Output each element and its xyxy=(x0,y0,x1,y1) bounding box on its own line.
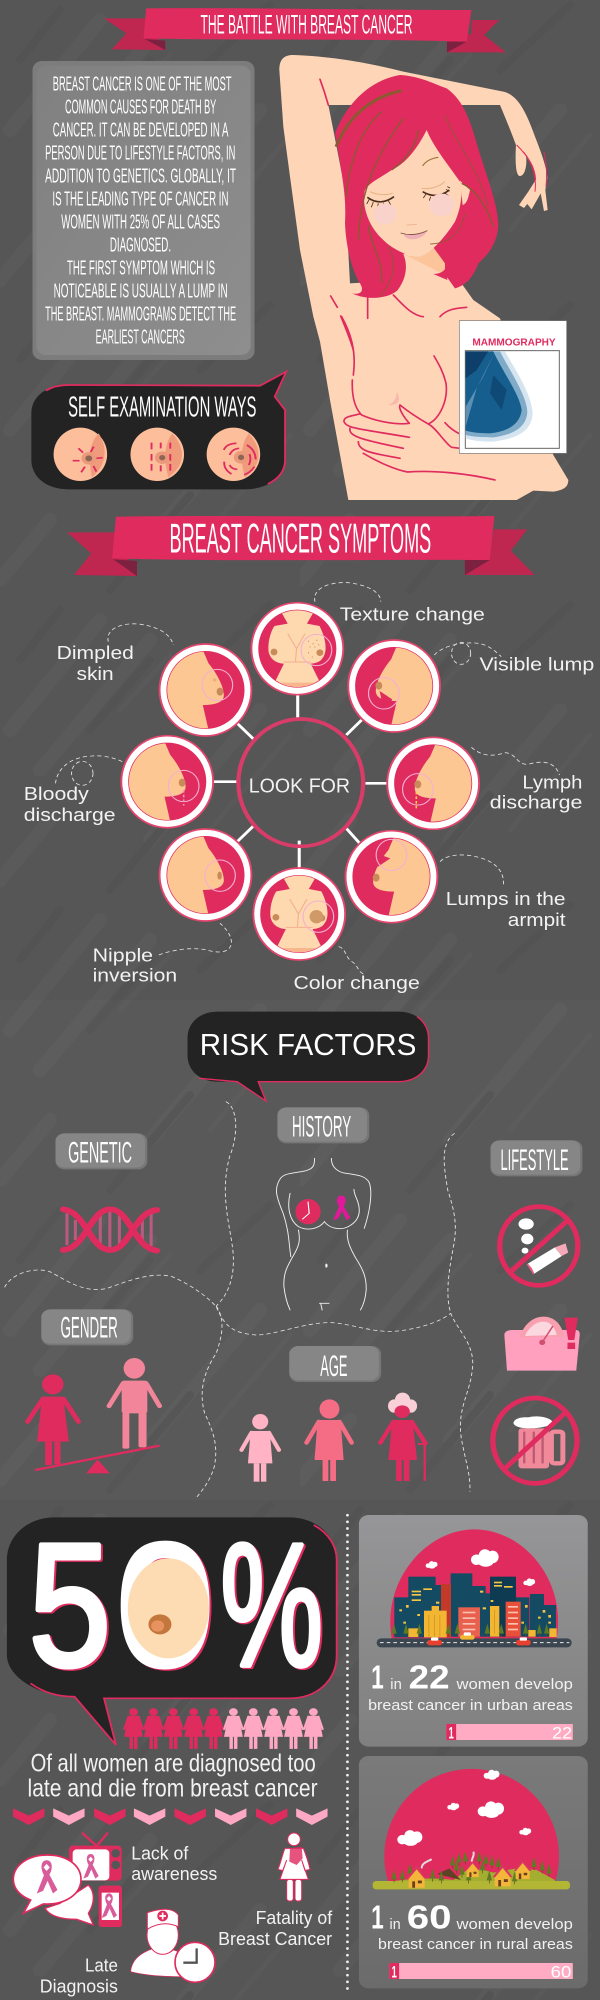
label: visible lump xyxy=(434,642,594,675)
section: symptoms xyxy=(24,515,594,994)
label: fatality of breast cancer xyxy=(218,1908,333,1950)
icon: no smoking xyxy=(500,1207,578,1285)
icon: gender seesaw xyxy=(28,1358,160,1473)
label: lack of awareness: Lack of xyxy=(131,1844,189,1864)
label: texture change xyxy=(315,583,485,625)
icon: no alcohol xyxy=(493,1398,577,1483)
mammography card: MAMMOGRAPHY xyxy=(472,338,556,349)
label: lumps in the armpit: armpit xyxy=(508,910,566,931)
diagnosis text: Of all women are diagnosed too xyxy=(31,1748,316,1777)
section: risk factors: GENDER xyxy=(60,1310,118,1344)
bar: rural: 1 xyxy=(391,1962,397,1981)
label: nipple inversion xyxy=(93,923,232,986)
row of women icons xyxy=(124,1708,323,1749)
label: color change xyxy=(293,947,420,994)
icon: radial exam xyxy=(54,428,107,481)
icon: age figures xyxy=(241,1393,426,1482)
stat: rural: 60 xyxy=(407,1899,452,1936)
self examination bubble xyxy=(31,372,286,489)
icon: doctor with clock xyxy=(131,1909,215,1982)
label: late diagnosis: Diagnosis xyxy=(40,1977,118,1997)
icon: vertical exam xyxy=(130,428,184,481)
section: intro: PERSON DUE TO LIFESTYLE FACTORS, IN xyxy=(45,142,235,164)
icon: torso history xyxy=(276,1158,371,1310)
stat: rural: 1 xyxy=(371,1899,384,1936)
look for ring xyxy=(238,719,363,846)
label: visible lump: Visible lump xyxy=(479,655,594,675)
section: statistics xyxy=(7,1506,588,1997)
chevrons xyxy=(13,1808,328,1825)
illustration: village xyxy=(373,1769,570,1889)
stat: urban: women develop xyxy=(455,1677,573,1693)
section: intro: IS THE LEADING TYPE OF CANCER IN xyxy=(52,188,228,210)
badge: dimpled skin xyxy=(160,644,251,736)
bar: urban: 22 xyxy=(552,1723,572,1742)
risk factors bubble xyxy=(187,1012,429,1101)
label: dimpled skin: skin xyxy=(77,664,114,685)
badge: lumps in the armpit xyxy=(346,831,437,923)
badge: lymph discharge xyxy=(387,737,479,829)
dashed dividers xyxy=(5,1102,473,1499)
label: lumps in the armpit xyxy=(440,855,566,931)
stat: urban: in xyxy=(390,1677,402,1693)
label: dimpled skin xyxy=(57,624,173,685)
label: nipple inversion: Nipple xyxy=(93,946,153,966)
label: bloody discharge: Bloody xyxy=(24,784,89,805)
illustration: city xyxy=(377,1529,572,1647)
label: bloody discharge: discharge xyxy=(24,805,116,826)
tag: age xyxy=(289,1346,381,1382)
label: fatality of breast cancer: Breast Cancer xyxy=(218,1929,332,1950)
intro text panel: EARLIEST CANCERS xyxy=(96,326,185,348)
badge: visible lump xyxy=(348,640,440,732)
panel: urban xyxy=(359,1515,588,1747)
intro text panel xyxy=(33,61,254,360)
50 percent bubble: % xyxy=(222,1508,325,1704)
tag: genetic xyxy=(55,1133,147,1169)
bar: rural xyxy=(389,1962,573,1981)
label: texture change: Texture change xyxy=(340,605,485,625)
tag: gender xyxy=(41,1309,133,1345)
stat: rural: breast cancer in rural areas xyxy=(378,1937,573,1953)
50 percent bubble: 0 xyxy=(118,1508,216,1704)
stat: rural: women develop xyxy=(455,1917,573,1933)
50 percent bubble: 5 xyxy=(31,1508,113,1704)
section: intro: CANCER. IT CAN BE DEVELOPED IN A xyxy=(53,119,229,141)
tag: history: HISTORY xyxy=(292,1110,351,1143)
panel: rural xyxy=(359,1756,588,1988)
stat: urban xyxy=(368,1659,573,1714)
section: intro: BREAST CANCER IS ONE OF THE MOST xyxy=(53,73,232,95)
label: dimpled skin: Dimpled xyxy=(57,643,134,664)
icon: circular exam xyxy=(207,428,260,481)
diagnosis text xyxy=(28,1748,318,1802)
bar: urban xyxy=(446,1723,573,1742)
section: intro xyxy=(31,8,568,500)
stat: urban: 1 xyxy=(371,1659,384,1696)
stat: rural: in xyxy=(390,1917,401,1933)
risk factors bubble: RISK FACTORS xyxy=(200,1027,416,1062)
tag: history xyxy=(277,1107,369,1143)
badge: nipple inversion xyxy=(160,829,251,921)
intro text panel: THE FIRST SYMPTOM WHICH IS xyxy=(67,257,215,279)
label: lumps in the armpit: Lumps in the xyxy=(446,889,566,910)
section: intro: THE BREAST. MAMMOGRAMS DETECT THE xyxy=(45,303,236,325)
diagnosis text: late and die from breast cancer xyxy=(28,1773,318,1802)
icon: fatality figure xyxy=(278,1833,310,1901)
symptoms ribbon xyxy=(67,515,535,576)
intro text panel: WOMEN WITH 25% OF ALL CASES xyxy=(61,211,220,233)
label: color change: Color change xyxy=(293,973,420,994)
label: lack of awareness: awareness xyxy=(131,1864,217,1885)
dotted divider xyxy=(344,1515,351,1993)
bar: rural: 60 xyxy=(551,1962,571,1981)
label: late diagnosis: Late xyxy=(85,1956,118,1976)
stat: rural xyxy=(371,1899,573,1953)
section: intro: ADDITION TO GENETICS. GLOBALLY, IT xyxy=(45,165,236,187)
woman illustration xyxy=(279,55,568,500)
label: lymph discharge: discharge xyxy=(490,793,582,813)
title ribbon xyxy=(104,8,506,52)
connectors xyxy=(212,695,388,868)
badge: bloody discharge xyxy=(121,736,213,828)
bar: urban: 1 xyxy=(448,1723,454,1742)
icon: breast in zero xyxy=(128,1558,209,1658)
stat: urban: breast cancer in urban areas xyxy=(368,1698,573,1714)
50 percent bubble: 5 xyxy=(29,1506,111,1702)
icon: dna xyxy=(63,1209,157,1251)
label: late diagnosis xyxy=(40,1956,118,1997)
label: lack of awareness xyxy=(131,1844,217,1885)
badge: texture change xyxy=(251,603,343,695)
icon: weight scale xyxy=(504,1317,580,1371)
label: lymph discharge xyxy=(471,747,582,813)
tag: genetic: GENETIC xyxy=(68,1136,132,1169)
section: risk factors xyxy=(5,1012,582,1499)
label: lymph discharge: Lymph xyxy=(522,773,582,793)
self examination bubble: SELF EXAMINATION WAYS xyxy=(68,391,256,423)
icon: lack of awareness media xyxy=(13,1833,122,1927)
intro text panel: NOTICEABLE IS USUALLY A LUMP IN xyxy=(54,280,228,302)
50 percent bubble xyxy=(7,1506,337,1745)
intro text panel: DIAGNOSED. xyxy=(110,234,171,256)
50 percent bubble: 0 xyxy=(116,1506,214,1702)
label: fatality of breast cancer: Fatality of xyxy=(256,1908,333,1929)
mammography card xyxy=(459,321,567,453)
tag: age: AGE xyxy=(320,1349,347,1382)
section: intro: COMMON CAUSES FOR DEATH BY xyxy=(65,96,216,118)
badge: color change xyxy=(253,868,345,960)
look for ring: LOOK FOR xyxy=(249,774,350,797)
50 percent bubble: % xyxy=(220,1506,323,1702)
label: bloody discharge xyxy=(24,756,122,826)
stat: urban: 22 xyxy=(409,1659,450,1696)
label: nipple inversion: inversion xyxy=(93,966,177,986)
